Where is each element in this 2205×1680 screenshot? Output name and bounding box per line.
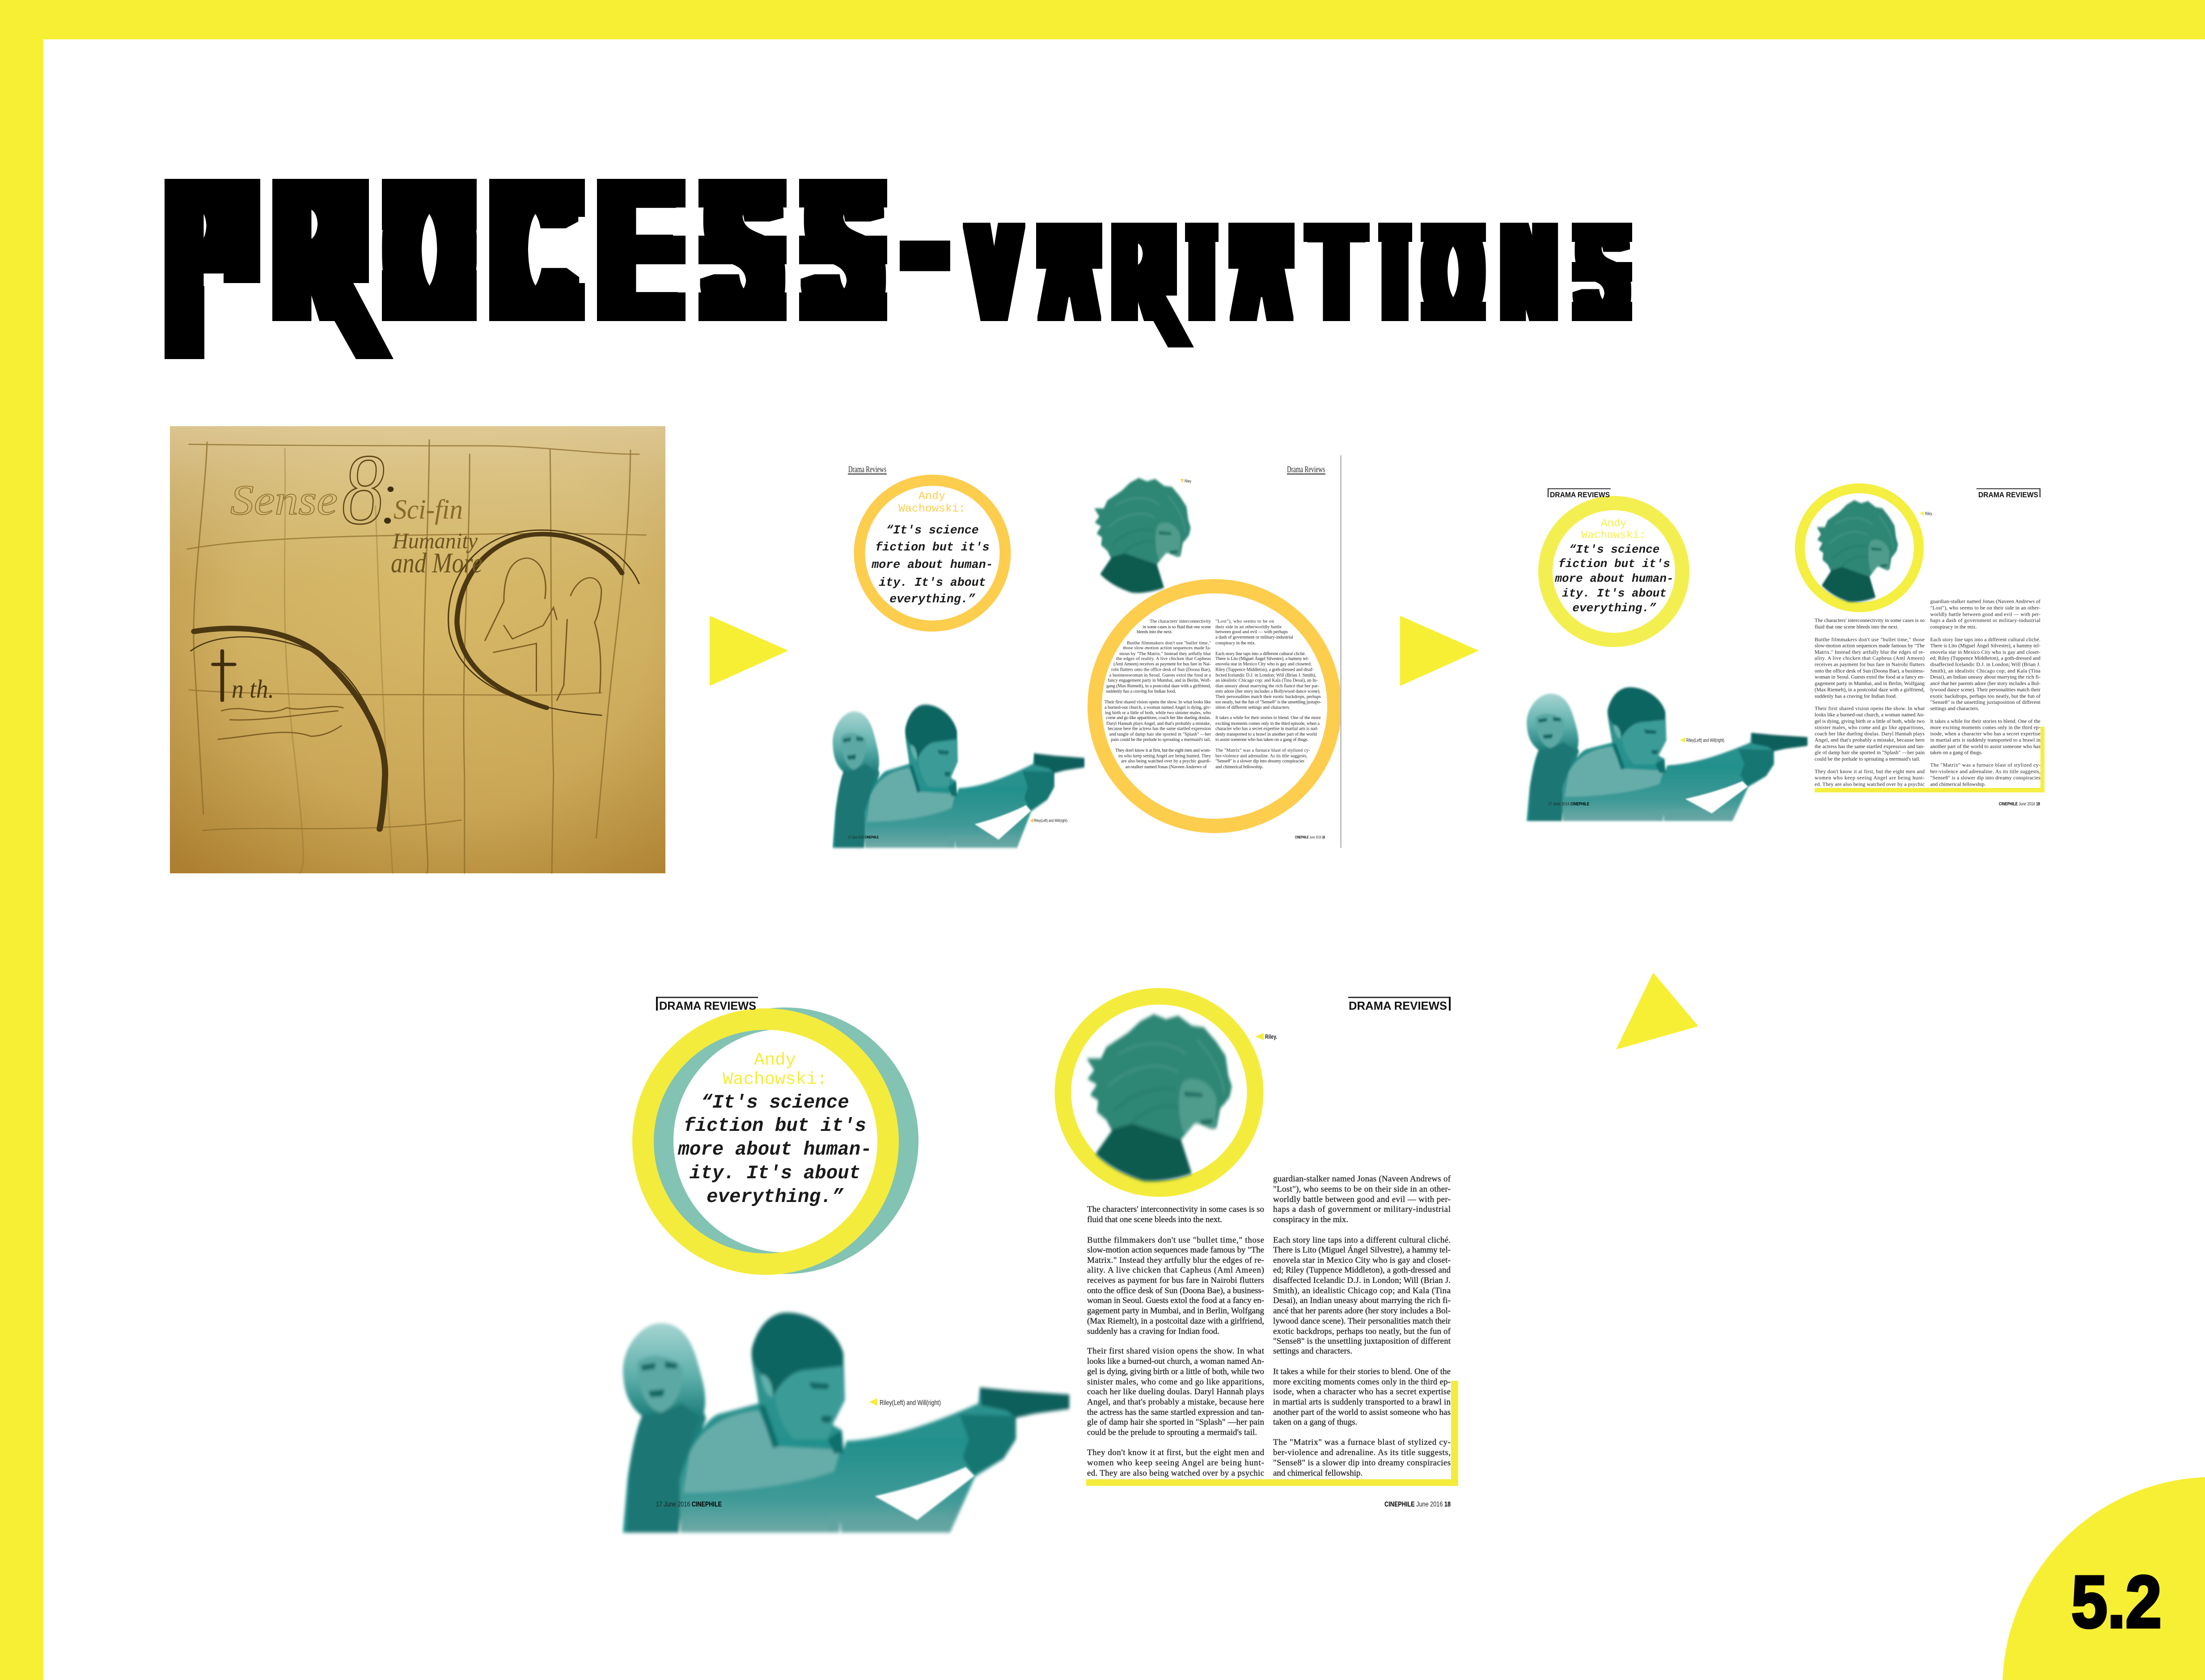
body text left column: a businesswoman in Seoul. Guests extol the food at a [1109, 673, 1211, 678]
footer right: CINEPHILE June 2016 18 [1384, 1501, 1451, 1508]
footer left: 17 June 2016 CINEPHILE [848, 835, 879, 839]
arrow: sketch to layout one [710, 616, 788, 686]
caption: Riley left and Will right: Riley(Left) and Will(right) [1034, 818, 1067, 823]
body text left column: slow-motion action sequences made famous by "The [1087, 1245, 1264, 1255]
body text left column: sinister males, who come and go like apparitions, [1087, 1377, 1264, 1387]
body text left column: ing birth or a little of both, while two sinister males, who [1105, 711, 1211, 715]
body text two columns: ality. A live chicken that Capheus (Aml Ameen) [1815, 655, 1925, 661]
sketch handwriting: Sci-fin [394, 495, 463, 525]
body text left column: pain could be the prelude to sprouting a mermaid's tail. [1111, 737, 1211, 742]
body text left column: and tangle of damp hair she sported in "Splash" —her [1109, 732, 1211, 737]
body text left column: Their first shared vision opens the show. In what looks like [1105, 700, 1211, 705]
sketch handwriting [230, 433, 482, 703]
body text right column: guardian-stalker named Jonas (Naveen Andrews of [1273, 1174, 1451, 1184]
body text right column: enovela star in Mexico City who is gay and closet- [1273, 1256, 1451, 1265]
quote attribution [723, 1050, 827, 1089]
body text left column: The characters' interconnectivity in some cases is so [1087, 1205, 1264, 1214]
footer right: CINEPHILE June 2016 18 [1295, 835, 1325, 839]
body text left column: Daryl Hannah plays Angel, and that's probably a mistake, [1106, 721, 1211, 726]
body text right column: disaffected Icelandic D.J. in London; Will (Brian J. [1273, 1276, 1451, 1285]
body text left column: are also being watched over by a psychic guardi- [1121, 759, 1211, 764]
body text two columns: looks like a burned-out church, a woman named An- [1815, 711, 1925, 718]
quote attribution: Wachowski: [723, 1070, 827, 1089]
title word: PROCESS-: PROCESS [170, 140, 877, 359]
body text two columns: gagement party in Mumbai, and in Berlin, Wolfgang [1815, 680, 1925, 686]
body text two columns: ed. They are also being watched over by a psychic [1815, 781, 1925, 787]
body text two columns: could be the prelude to sprouting a mermaid's tail. [1815, 756, 1920, 762]
body text two columns: the actress has the same startled expression and tan- [1815, 743, 1925, 749]
body text left column: fluid that one scene bleeds into the next. [1087, 1215, 1222, 1224]
arrow: layout one to layout two [1400, 616, 1479, 686]
body text left column: They don't know it at first, but the eight men and wom- [1115, 748, 1211, 753]
body text right column: denly transported to a brawl in another part of the world [1215, 732, 1317, 737]
body text right column: Their personalities match their exotic backdrops, perhaps [1215, 694, 1321, 699]
body text two columns: isode, when a character who has a secret expertise [1930, 730, 2040, 736]
caption: Riley [1181, 479, 1191, 483]
large orange ring with text [1095, 586, 1334, 826]
pull quote [677, 1092, 872, 1208]
body text two columns: "Sense8" is the unsettling juxtaposition of different [1930, 699, 2041, 705]
body text right column: ber-violence and adrenaline. As its title suggests, [1215, 754, 1308, 758]
body text left column: suddenly has a craving for Indian food. [1087, 1327, 1219, 1336]
body text two columns: "Sense8" is a slower dip into dreamy conspiracies [1930, 774, 2040, 781]
body text two columns: Each story line taps into a different cultural cliché. [1930, 636, 2040, 643]
pull quote: everything.” [1572, 601, 1657, 615]
body text right column: taken on a gang of thugs. [1273, 1418, 1357, 1427]
body text right column: haps a dash of government or military-industrial [1273, 1205, 1451, 1214]
body text right column: dian uneasy about marrying the rich fiancé that her par- [1215, 684, 1319, 689]
body text two columns: The "Matrix" was a furnace blast of stylized cy- [1930, 762, 2040, 768]
body text two columns: exotic backdrops, perhaps too neatly, but the fun of [1930, 693, 2040, 699]
body text left column: come and go like apparitions, coach her like dueling doulas. [1106, 715, 1211, 720]
quote attribution: Wachowski: [1581, 529, 1646, 542]
body text two columns [1815, 598, 2041, 787]
body text right column [1273, 1174, 1451, 1478]
body text two columns: and chimerical fellowship. [1930, 781, 1986, 787]
pull quote: more about human- [677, 1139, 872, 1160]
body text two columns: more exciting moments comes only in the third ep- [1930, 724, 2040, 731]
hand-drawn sketch photo [170, 426, 665, 873]
body text right column: enovela star in Mexico City who is gay and closeted; [1215, 662, 1312, 667]
yellow ring around Riley [1063, 996, 1255, 1189]
body text left column: looks like a burned-out church, a woman named An- [1087, 1357, 1264, 1366]
yellow corner bracket [1815, 727, 2044, 792]
body text right column: It takes a while for their stories to blend. One of the more [1215, 715, 1321, 720]
body text left column: those slow-motion action sequences made fa- [1123, 646, 1211, 651]
body text two columns: onto the office desk of Sun (Doona Bae), a business- [1815, 668, 1925, 674]
pull quote [871, 524, 993, 606]
pull quote: “It's science [886, 524, 979, 537]
body text left column: Butthe filmmakers don't use "bullet time," those [1087, 1236, 1264, 1245]
quote attribution [898, 490, 965, 515]
body text right column: more exciting moments comes only in the third ep- [1273, 1377, 1451, 1387]
body text two columns: slow-motion action sequences made famous by "The [1815, 643, 1925, 649]
body text right column: exciting moments comes only in the third episode, when a [1215, 721, 1320, 726]
header: drama reviews right [1287, 465, 1325, 474]
footer right: CINEPHILE June 2016 18 [1999, 802, 2040, 807]
body text two columns: receives as payment for bus fare in Nairobi flutters [1815, 661, 1925, 668]
photo: Riley head [1817, 500, 1898, 602]
body text two columns: women who keep seeing Angel are being hunt- [1815, 774, 1925, 781]
body text right column: isode, when a character who has a secret expertise [1273, 1387, 1451, 1396]
body text right column: between good and evil — with perhaps [1215, 630, 1288, 635]
body text two columns: There is Lito (Miguel Ángel Silvestre), a hammy tel- [1930, 643, 2040, 649]
body text right column: "Sense8" is a slower dip into dreamy conspiracies [1215, 759, 1304, 764]
title word: PROCESS-: - [908, 129, 942, 348]
body text left column: (Aml Ameen) receives as payment for bus fare in Nai- [1113, 662, 1211, 667]
body text right column: ber-violence and adrenaline. As its title suggests, [1273, 1448, 1451, 1457]
caption: Riley: Riley. [1265, 1033, 1277, 1040]
sketch handwriting: Sense [230, 476, 338, 524]
body text right column: "Sense8" is a slower dip into dreamy conspiracies [1273, 1458, 1451, 1468]
body text left column: en who keep seeing Angel are being hunted. They [1118, 754, 1211, 758]
panel: layout variation one (orange) [833, 455, 1342, 848]
panel: final layout (yellow and teal) [623, 996, 1458, 1532]
body text left column: onto the office desk of Sun (Doona Bae), a business- [1087, 1286, 1264, 1295]
body text left column [1105, 619, 1211, 770]
quote attribution: Andy [754, 1050, 796, 1070]
photo: couple with gun [623, 1312, 1069, 1532]
body text right column: There is Lito (Miguel Ángel Silvestre), a hammy tel- [1215, 656, 1309, 661]
body text left column: Matrix." Instead they artfully blur the edges of re- [1087, 1256, 1264, 1265]
body text left column: because here the actress has the same startled expression [1108, 726, 1211, 732]
body text right column [1215, 619, 1322, 770]
caption: Riley: Riley [1185, 479, 1191, 483]
body text left column: ed. They are also being watched over by a psychic [1087, 1468, 1264, 1478]
title [165, 179, 1632, 359]
body text two columns: coach her like dueling doulas. Daryl Hannah plays [1815, 730, 1925, 736]
body text right column: sition of different settings and characters. [1215, 705, 1290, 710]
body text two columns: suddenly has a craving for Indian food. [1815, 693, 1897, 699]
body text right column: ed; Riley (Tuppence Middleton), a goth-dressed and [1273, 1265, 1451, 1275]
body text right column: character who has a secret expertise in martial arts is sud- [1215, 726, 1318, 732]
body text right column: too neatly, but the fun of "Sense8" is the unsettling juxtapo- [1215, 700, 1322, 705]
body text right column: and chimerical fellowship. [1273, 1468, 1363, 1478]
header: drama reviews right: DRAMA REVIEWS [1978, 491, 2038, 499]
title swashes: block serifs, long stem and legs [165, 179, 1632, 359]
body text two columns: sinister males, who come and go like apparitions, [1815, 724, 1925, 731]
body text left column: The characters' interconnectivity [1150, 619, 1211, 624]
body text two columns: Angel, and that's probably a mistake, because here [1815, 737, 1925, 743]
body text right column: conspiracy in the mix. [1273, 1215, 1348, 1224]
body text left column: Butthe filmmakers don't use "bullet time," [1127, 641, 1211, 646]
body text right column: Smith), an idealistic Chicago cop; and Kala (Tina [1273, 1286, 1451, 1295]
body text two columns: They don't know it at first, but the eight men and [1815, 768, 1925, 774]
body text right column: "Lost"), who seems to be on their side in an other- [1273, 1185, 1451, 1194]
sketch handwriting: n th. [232, 674, 274, 703]
body text left column: an-stalker named Jonas (Naveen Andrews of [1125, 765, 1207, 770]
body text right column: The "Matrix" was a furnace blast of stylized cy- [1215, 748, 1310, 753]
body text right column: worldly battle between good and evil — with per- [1273, 1195, 1451, 1204]
page divider [1340, 455, 1342, 848]
body text left column: bleeds into the next. [1137, 630, 1172, 635]
body text right column: fected Icelandic D.J. in London; Will (Brian J. Smith), [1215, 673, 1316, 678]
body text two columns: another part of the world to assist someone who has [1930, 743, 2040, 749]
body text right column: Riley (Tuppence Middleton), a goth-dressed and disaf- [1215, 667, 1314, 673]
body text right column: exotic backdrops, perhaps too neatly, but the fun of [1273, 1327, 1451, 1336]
body text left column: coach her like dueling doulas. Daryl Hannah plays [1087, 1387, 1264, 1396]
body text two columns: Their first shared vision opens the show. In what [1815, 705, 1925, 711]
body text right column: their side in an otherworldly battle [1215, 625, 1282, 630]
sketch handwriting: Humanity [392, 528, 478, 553]
title word: PROCESS- [165, 207, 950, 321]
body text two columns: gel is dying, giving birth or a little of both, while two [1815, 718, 1925, 724]
pull quote: “It's science [701, 1092, 849, 1113]
body text left column: in some cases is so fluid that one scene [1143, 625, 1211, 630]
body text right column: and chimerical fellowship. [1215, 765, 1263, 770]
caption: Riley left and Will right [1030, 818, 1067, 823]
body text right column: "Sense8" is the unsettling juxtaposition of different [1273, 1337, 1451, 1346]
body text right column: to assist someone who has taken on a gang of thugs. [1215, 737, 1308, 742]
body text left column: (Max Riemelt), in a postcoital daze with a girlfriend, [1087, 1316, 1264, 1326]
body text right column: "Lost"), who seems to be on [1215, 619, 1274, 624]
quote attribution: Andy [1601, 518, 1627, 530]
yellow corner bracket [1086, 1381, 1458, 1486]
header: drama reviews right: DRAMA REVIEWS [1349, 999, 1447, 1012]
body text two columns: in martial arts is suddenly transported to a brawl in [1930, 737, 2040, 743]
pull quote: ity. It's about [1562, 587, 1667, 600]
body text left column: receives as payment for bus fare in Nairobi flutters [1087, 1276, 1264, 1285]
body text right column: conspiracy in the mix. [1215, 641, 1256, 646]
body text two columns: ed; Riley (Tuppence Middleton), a goth-dressed and [1930, 655, 2040, 661]
corner badge: yellow quarter circle [2002, 1477, 2205, 1680]
caption: Riley: Riley. [1925, 512, 1933, 516]
body text two columns: fluid that one scene bleeds into the next. [1815, 623, 1899, 630]
body text two columns: haps a dash of government or military-industrial [1930, 617, 2041, 623]
pull quote: fiction but it's [684, 1115, 866, 1137]
quote attribution: Wachowski: [898, 502, 965, 515]
caption: Riley [1920, 511, 1933, 516]
body text two columns: taken on a gang of thugs. [1930, 749, 1982, 756]
footer left: 17 June 2016 CINEPHILE [656, 1501, 722, 1508]
body text right column: Desai), an Indian uneasy about marrying the rich fi- [1273, 1296, 1451, 1305]
body text two columns: settings and characters. [1930, 705, 1979, 711]
caption: Riley left and Will right [1680, 737, 1724, 743]
body text right column: The "Matrix" was a furnace blast of stylized cy- [1273, 1438, 1451, 1447]
body text right column: There is Lito (Miguel Ángel Silvestre), a hammy tel- [1273, 1245, 1451, 1255]
caption: Riley left and Will right: Riley(Left) and Will(right) [1686, 738, 1724, 743]
title word: VARIATIONS: VARIATIONS [971, 196, 1625, 348]
caption: Riley left and Will right [869, 1398, 941, 1407]
body text right column: another part of the world to assist someone who has [1273, 1408, 1451, 1417]
body text two columns: gle of damp hair she sported in "Splash" —her pain [1815, 749, 1925, 756]
body text left column: gang (Max Riemelt), in a postcoital daze with a girlfriend, [1106, 684, 1211, 689]
body text right column: Each story line taps into a different cultural cliché. [1215, 652, 1306, 656]
pull quote: everything.” [889, 592, 976, 606]
pull quote: more about human- [1554, 572, 1674, 585]
photo: couple with gun [833, 705, 1084, 848]
body text two columns: (Max Riemelt), in a postcoital daze with a girlfriend, [1815, 686, 1925, 693]
body text right column: a dash of government or military-industrial [1215, 635, 1293, 640]
caption: Riley [1255, 1033, 1277, 1040]
header: drama reviews left: DRAMA REVIEWS [659, 999, 756, 1012]
pull quote: “It's science [1569, 543, 1659, 556]
footer left: 17 June 2016 CINEPHILE [1548, 802, 1589, 807]
body text right column: settings and characters. [1273, 1346, 1352, 1356]
small orange quote ring [859, 480, 1005, 626]
pull quote: more about human- [871, 558, 993, 571]
body text two columns: Desai), an Indian uneasy about marrying the rich fi- [1930, 674, 2040, 680]
body text left column: the actress has the same startled expression and tan- [1087, 1408, 1264, 1417]
body text left column [1087, 1205, 1265, 1478]
body text two columns: worldly battle between good and evil — with per- [1930, 611, 2040, 617]
pull quote: everything.” [707, 1186, 844, 1208]
body text right column: It takes a while for their stories to blend. One of the [1273, 1367, 1451, 1376]
pull quote: fiction but it's [1558, 557, 1670, 571]
body text right column: lywood dance scene). Their personalities match their [1273, 1316, 1451, 1326]
body text two columns: It takes a while for their stories to blend. One of the [1930, 718, 2040, 724]
body text left column: gle of damp hair she sported in "Splash" —her pain [1087, 1418, 1265, 1427]
sketch handwriting: and More [391, 547, 482, 579]
body text left column: gel is dying, giving birth or a little of both, while two [1087, 1367, 1264, 1376]
panel: layout variation two (yellow) [1527, 488, 2044, 821]
caption: Riley left and Will right: Riley(Left) and Will(right) [880, 1399, 941, 1407]
quote attribution [1581, 518, 1646, 542]
body text right column: an idealistic Chicago cop; and Kala (Tina Desai), an In- [1215, 678, 1318, 683]
arrow: layout two to final layout [1616, 973, 1698, 1049]
body text left column: a burned-out church, a woman named Angel is dying, giv- [1105, 705, 1211, 710]
pull quote: fiction but it's [875, 541, 990, 554]
body text left column: Angel, and that's probably a mistake, because here [1087, 1397, 1264, 1407]
yellow quote ring [643, 1019, 888, 1264]
body text right column: in martial arts is suddenly transported to a brawl in [1273, 1397, 1451, 1407]
body text two columns: woman in Seoul. Guests extol the food at a fancy en- [1815, 674, 1925, 680]
sketch handwriting: 8 [342, 433, 385, 545]
header: drama reviews left [848, 465, 887, 474]
body text two columns: guardian-stalker named Jonas (Naveen Andrews of [1930, 598, 2040, 605]
pull quote: ity. It's about [690, 1163, 860, 1184]
body text two columns: ber-violence and adrenaline. As its title suggests, [1930, 768, 2040, 774]
body text left column: robi flutters onto the office desk of Sun (Doona Bae), [1111, 667, 1211, 673]
body text left column: fancy engagement party in Mumbai, and in Berlin, Wolf- [1108, 678, 1211, 683]
quote attribution: Andy [918, 490, 945, 503]
body text right column: Each story line taps into a different cultural cliché. [1273, 1236, 1451, 1245]
pull quote [1554, 543, 1674, 615]
body text two columns: Butthe filmmakers don't use "bullet time," those [1815, 636, 1925, 643]
body text two columns: Matrix." Instead they artfully blur the edges of re- [1815, 649, 1925, 655]
yellow ring around Riley [1800, 488, 1919, 607]
body text right column: ancé that her parents adore (her story includes a Bol- [1273, 1306, 1451, 1316]
body text left column: ality. A live chicken that Capheus (Aml Ameen) [1087, 1265, 1264, 1275]
body text two columns: conspiracy in the mix. [1930, 623, 1977, 630]
body text two columns: ancé that her parents adore (her story includes a Bol- [1930, 680, 2040, 686]
body text two columns: "Lost"), who seems to be on their side in an other- [1930, 605, 2040, 611]
pull quote: ity. It's about [879, 576, 986, 589]
body text two columns: lywood dance scene). Their personalities match their [1930, 686, 2040, 693]
body text left column: They don't know it at first, but the eight men and [1087, 1448, 1265, 1457]
body text left column: suddenly has a craving for Indian food. [1106, 689, 1176, 694]
body text two columns: enovela star in Mexico City who is gay and closet- [1930, 649, 2040, 655]
body text left column: gagement party in Mumbai, and in Berlin, Wolfgang [1087, 1306, 1265, 1316]
header: drama reviews right: Drama Reviews [1287, 465, 1325, 474]
body text left column: the edges of reality. A live chicken that Capheus [1116, 656, 1211, 661]
body text right column: ents adore (her story includes a Bollywood dance scene). [1215, 689, 1320, 694]
body text left column: could be the prelude to sprouting a mermaid's tail. [1087, 1428, 1257, 1437]
body text two columns: Smith), an idealistic Chicago cop; and Kala (Tina [1930, 668, 2041, 674]
photo: couple with gun [1527, 687, 1807, 821]
photo: Riley head [1087, 1014, 1232, 1181]
header: drama reviews left: Drama Reviews [848, 465, 886, 474]
body text left column: Their first shared vision opens the show. In what [1087, 1346, 1265, 1356]
body text left column: women who keep seeing Angel are being hunt- [1087, 1458, 1264, 1468]
body text left column: woman in Seoul. Guests extol the food at a fancy en- [1087, 1296, 1264, 1305]
body text two columns: disaffected Icelandic D.J. in London; Will (Brian J. [1930, 661, 2040, 668]
header: drama reviews left: DRAMA REVIEWS [1550, 491, 1610, 499]
photo: Riley head [1094, 478, 1191, 593]
teal offset ring [663, 1018, 908, 1263]
body text left column: mous by "The Matrix." Instead they artfully blur [1120, 652, 1211, 656]
yellow quote ring [1545, 503, 1682, 640]
section number: 5.2 [2071, 1561, 2162, 1643]
body text two columns: The characters' interconnectivity in some cases is so [1815, 617, 1925, 623]
